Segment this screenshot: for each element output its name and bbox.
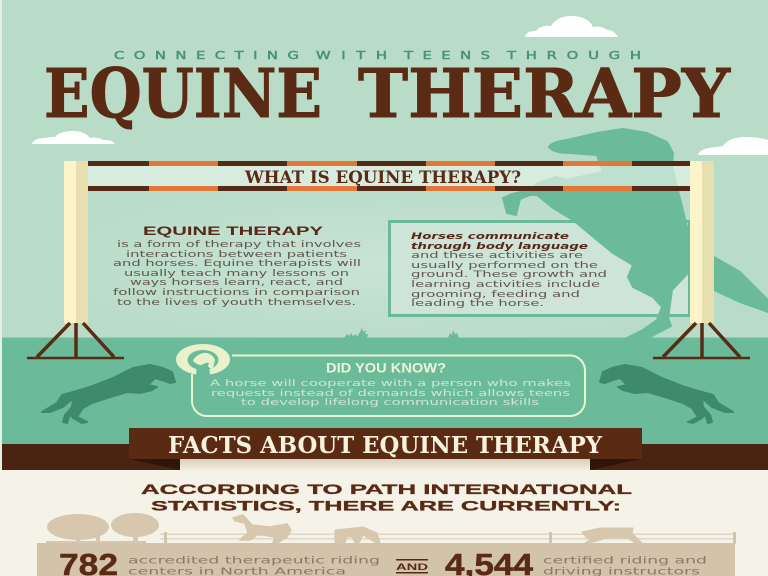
panel: cream lower section bbox=[0, 470, 768, 576]
cloud: top right bbox=[525, 16, 618, 37]
icon: walking horse bbox=[582, 528, 642, 543]
stand: right bbox=[653, 323, 750, 358]
banner: ribbon folds bbox=[129, 459, 642, 470]
text block: horses communicate bbox=[411, 232, 607, 309]
stand: left bbox=[27, 323, 124, 358]
icon: horseshoe bbox=[176, 344, 230, 376]
heading: according to path: ACCORDING TO PATH INTERNATIONAL bbox=[141, 482, 632, 497]
text block: did you know body: A horse will cooperate with a person who makes bbox=[210, 379, 572, 389]
icon: grass tufts bbox=[344, 327, 459, 338]
text block: horses communicate: and these activities are bbox=[411, 251, 583, 261]
text block: horses communicate: Horses communicate bbox=[411, 232, 569, 242]
label: and bbox=[396, 559, 429, 574]
title: THERAPY bbox=[358, 54, 731, 133]
text block: riding centers bbox=[128, 556, 380, 576]
ground bbox=[2, 338, 768, 448]
label: and: AND bbox=[396, 562, 429, 572]
subtitle: CONNECTING bbox=[114, 50, 299, 62]
title: EQUINE bbox=[44, 54, 322, 133]
text block: horses communicate: grooming, feeding and bbox=[411, 290, 580, 300]
text block: riding centers: accredited therapeutic riding bbox=[128, 556, 380, 566]
subtitle: THROUGH bbox=[506, 50, 641, 62]
heading: what is equine therapy: WHAT IS EQUINE THERAPY? bbox=[244, 168, 521, 187]
cloud: left bbox=[32, 131, 115, 144]
icon: jumping horse left bbox=[42, 365, 175, 423]
text block: horses communicate: usually performed on the bbox=[411, 261, 598, 271]
panel: stats strip bbox=[37, 543, 735, 576]
text block: horses communicate: through body language bbox=[411, 242, 588, 252]
callout: did you know bbox=[176, 344, 585, 416]
rail: bottom bbox=[88, 186, 690, 191]
fence bbox=[160, 532, 736, 544]
subtitle: TEENS bbox=[403, 50, 490, 62]
text block: equine therapy definition: and horses. Equine therapists will bbox=[113, 259, 361, 269]
icon: rearing horse silhouette bbox=[503, 129, 768, 338]
text block: equine therapy definition: ways horses learn, react, and bbox=[130, 278, 343, 288]
banner: facts about equine therapy: FACTS ABOUT EQUINE THERAPY bbox=[168, 431, 602, 459]
icon: trees bbox=[46, 513, 159, 544]
text block: equine therapy definition: is a form of therapy that involves bbox=[117, 240, 362, 250]
text block: equine therapy definition: usually teach many lessons on bbox=[124, 269, 349, 279]
text block: horses communicate: leading the horse. bbox=[411, 299, 544, 309]
panel: jump rail band bbox=[88, 166, 690, 186]
post: left bbox=[64, 161, 88, 323]
band: dark brown stripe bbox=[2, 444, 768, 470]
heading: according to path: STATISTICS, THERE ARE CURRENTLY: bbox=[151, 498, 621, 514]
icon: grazing horse bbox=[335, 527, 380, 543]
heading: did you know: DID YOU KNOW? bbox=[326, 360, 446, 376]
text block: did you know body: requests instead of demands which allows teens bbox=[211, 389, 571, 399]
title bbox=[44, 54, 731, 133]
heading: according to path bbox=[141, 482, 632, 514]
text block: horses communicate: ground. These growth and bbox=[411, 270, 607, 280]
text block: horses communicate: learning activities include bbox=[411, 280, 600, 290]
subtitle: WITH bbox=[316, 50, 387, 62]
icon: galloping horse bbox=[233, 515, 291, 543]
text block: equine therapy definition: to the lives of youth themselves. bbox=[117, 298, 356, 308]
rail: top bbox=[88, 161, 690, 166]
cloud: right bbox=[698, 137, 768, 155]
text block: did you know body: to develop lifelong communication skills bbox=[241, 398, 540, 408]
text block: equine therapy definition: interactions between patients bbox=[126, 250, 348, 260]
text block: instructors bbox=[543, 556, 707, 576]
text block: did you know body bbox=[210, 379, 572, 408]
post: right bbox=[690, 161, 714, 323]
text block: equine therapy definition: follow instructions in comparison bbox=[113, 288, 360, 298]
panel: right text box bbox=[390, 222, 690, 316]
icon: jumping horse right bbox=[600, 365, 733, 423]
subtitle bbox=[114, 50, 641, 62]
text block: equine therapy definition bbox=[113, 226, 362, 308]
text block: instructors: certified riding and bbox=[543, 556, 707, 566]
text block: equine therapy definition: EQUINE THERAPY bbox=[143, 226, 324, 238]
